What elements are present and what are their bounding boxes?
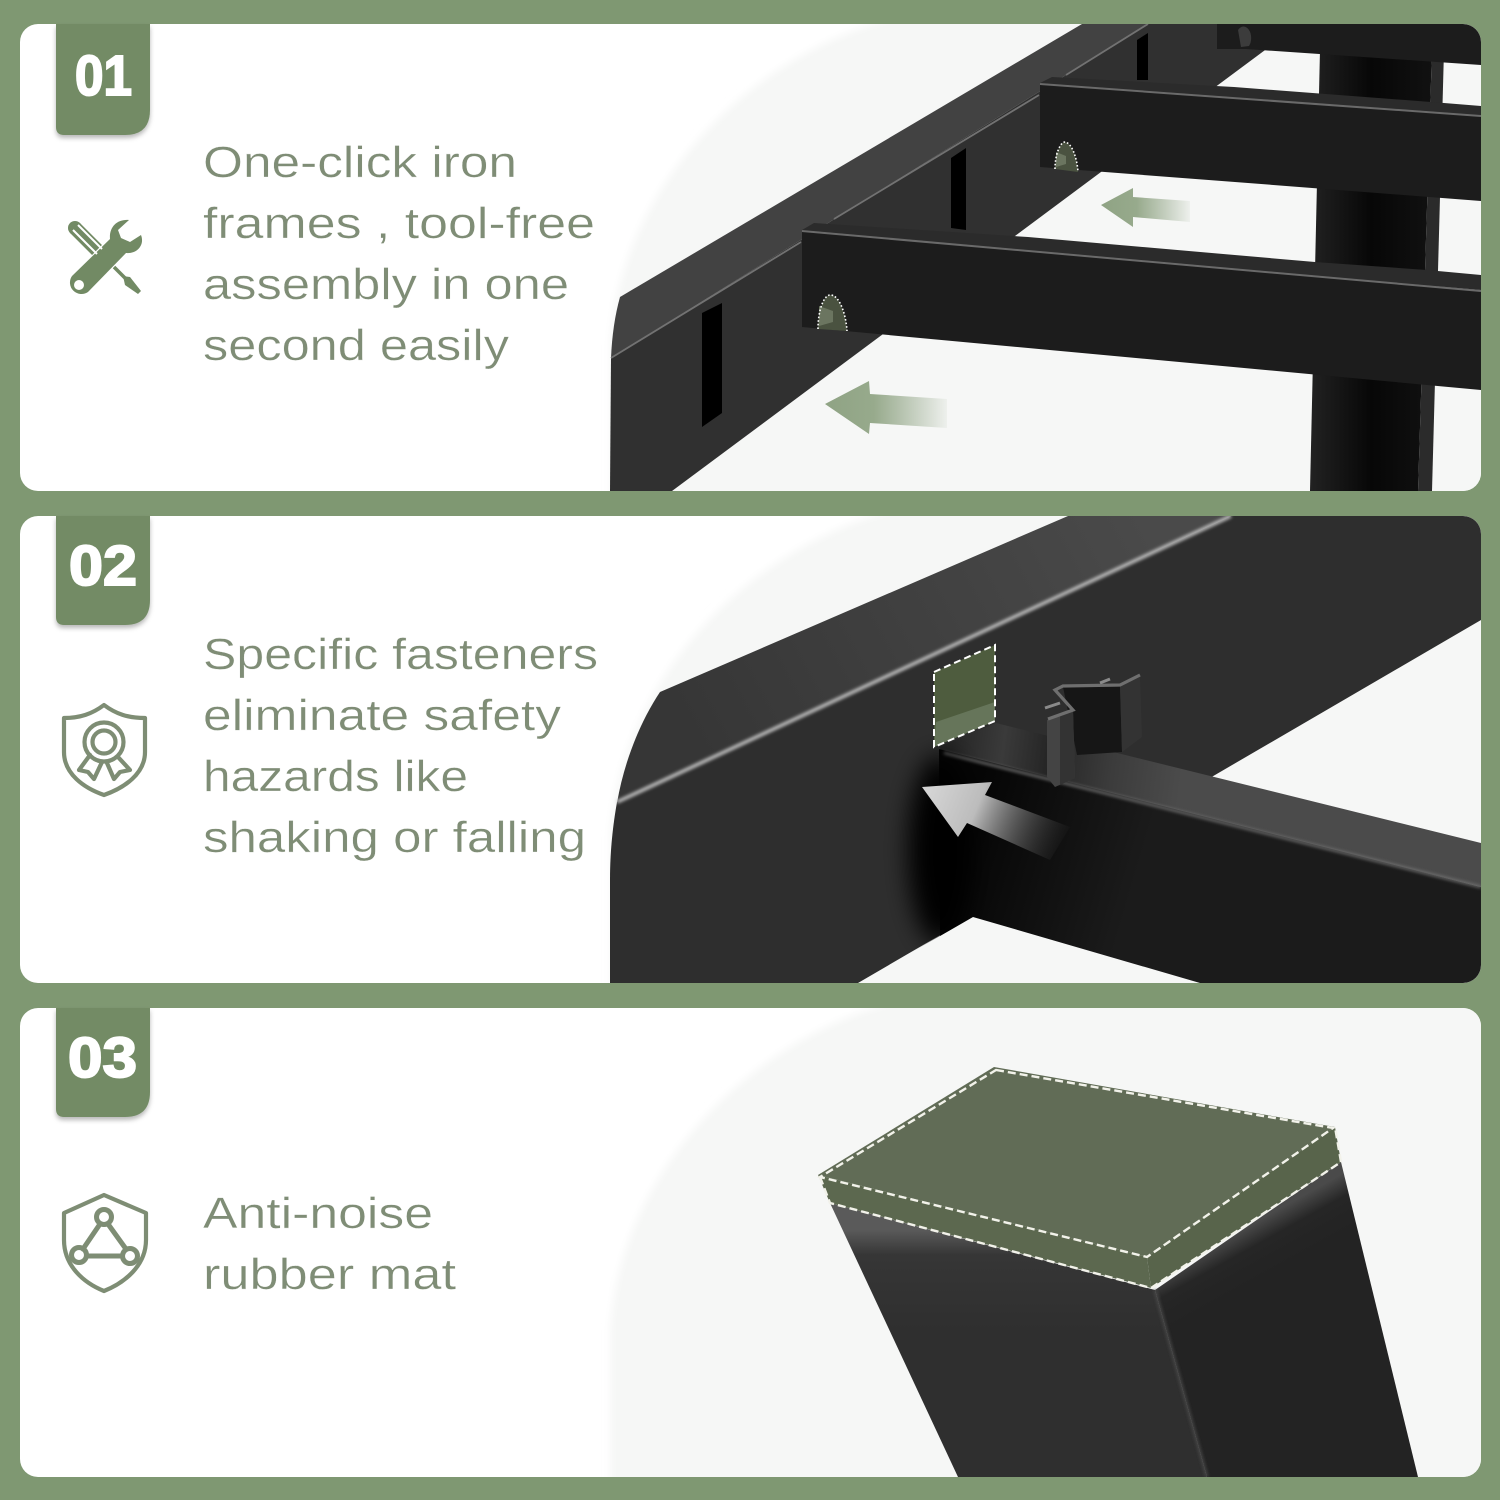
arrow: insertion direction xyxy=(922,782,1070,860)
notch: rear slat hook xyxy=(1055,142,1078,172)
arrow: rear slat direction xyxy=(1101,188,1190,227)
illustration: bed frame corner with slats xyxy=(610,14,1500,520)
rubber mat xyxy=(818,1067,1341,1288)
icon: shield with rosette xyxy=(64,705,145,795)
text: anti-noise rubber mat: Anti-noise xyxy=(203,1189,433,1238)
panel: one-click iron frames xyxy=(20,14,1500,520)
illustration: leg with rubber mat xyxy=(610,998,1500,1500)
dashed green slot xyxy=(934,645,995,747)
step badge 03 xyxy=(56,1008,150,1117)
fastener clip xyxy=(1045,675,1142,787)
text: one-click iron frames: frames , tool-free xyxy=(203,199,595,248)
text: anti-noise rubber mat: rubber mat xyxy=(203,1250,456,1299)
text: specific fasteners: shaking or falling xyxy=(203,813,586,862)
arrow: front slat direction xyxy=(825,381,947,434)
illustration: rail, crossbar and fastener xyxy=(610,506,1500,1012)
text: one-click iron frames: second easily xyxy=(203,321,509,370)
step badge 01: 01 xyxy=(75,44,132,108)
text: one-click iron frames xyxy=(203,138,595,370)
text: specific fasteners: hazards like xyxy=(203,752,468,801)
icon: wrench and screwdriver xyxy=(68,220,142,294)
step badge 03: 03 xyxy=(68,1026,137,1090)
step badge 01 xyxy=(56,24,150,135)
panel: specific fasteners xyxy=(20,506,1500,1012)
text: one-click iron frames: assembly in one xyxy=(203,260,569,309)
text: anti-noise rubber mat xyxy=(203,1189,456,1299)
text: specific fasteners: Specific fasteners xyxy=(203,630,598,679)
text: one-click iron frames: One-click iron xyxy=(203,138,517,187)
icon: shield with triangle xyxy=(64,1195,146,1291)
notch: front slat hook xyxy=(818,295,847,331)
panel: anti-noise rubber mat xyxy=(20,998,1500,1500)
text: specific fasteners xyxy=(203,630,598,862)
step badge 02: 02 xyxy=(69,534,137,598)
text: specific fasteners: eliminate safety xyxy=(203,691,561,740)
step badge 02 xyxy=(56,516,150,625)
